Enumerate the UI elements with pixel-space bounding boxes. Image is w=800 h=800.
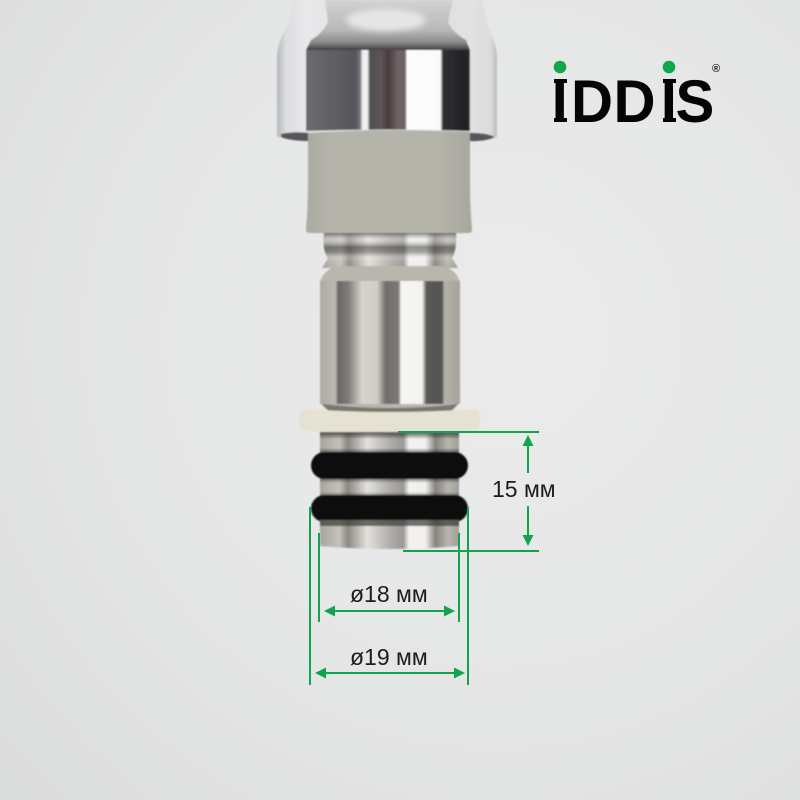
- logo registered mark: ®: [712, 63, 720, 75]
- photo: faucet connector: [277, 0, 497, 549]
- logo: IDDIS: [552, 61, 720, 135]
- logo serifs: [554, 79, 676, 122]
- washer: [299, 409, 480, 434]
- logo wordmark: IDDIS: [552, 67, 714, 135]
- metal tip: [320, 520, 459, 549]
- metal body: [320, 266, 460, 412]
- logo dots: [554, 61, 675, 73]
- o-ring upper: [311, 452, 468, 479]
- grey sleeve: [306, 130, 472, 234]
- dimension: diameter 19 mm: [310, 507, 468, 685]
- metal grooves: [320, 432, 459, 499]
- label: diameter 19 mm: ø19 мм: [350, 644, 428, 670]
- dimension: length 15 mm: [398, 432, 556, 551]
- dimension: diameter 18 mm: [319, 533, 459, 622]
- o-ring lower: [311, 495, 468, 522]
- label: 15 mm: 15 мм: [492, 476, 556, 502]
- metal neck: [322, 233, 458, 268]
- chrome nut: [277, 0, 497, 141]
- label: diameter 18 mm: ø18 мм: [350, 581, 428, 607]
